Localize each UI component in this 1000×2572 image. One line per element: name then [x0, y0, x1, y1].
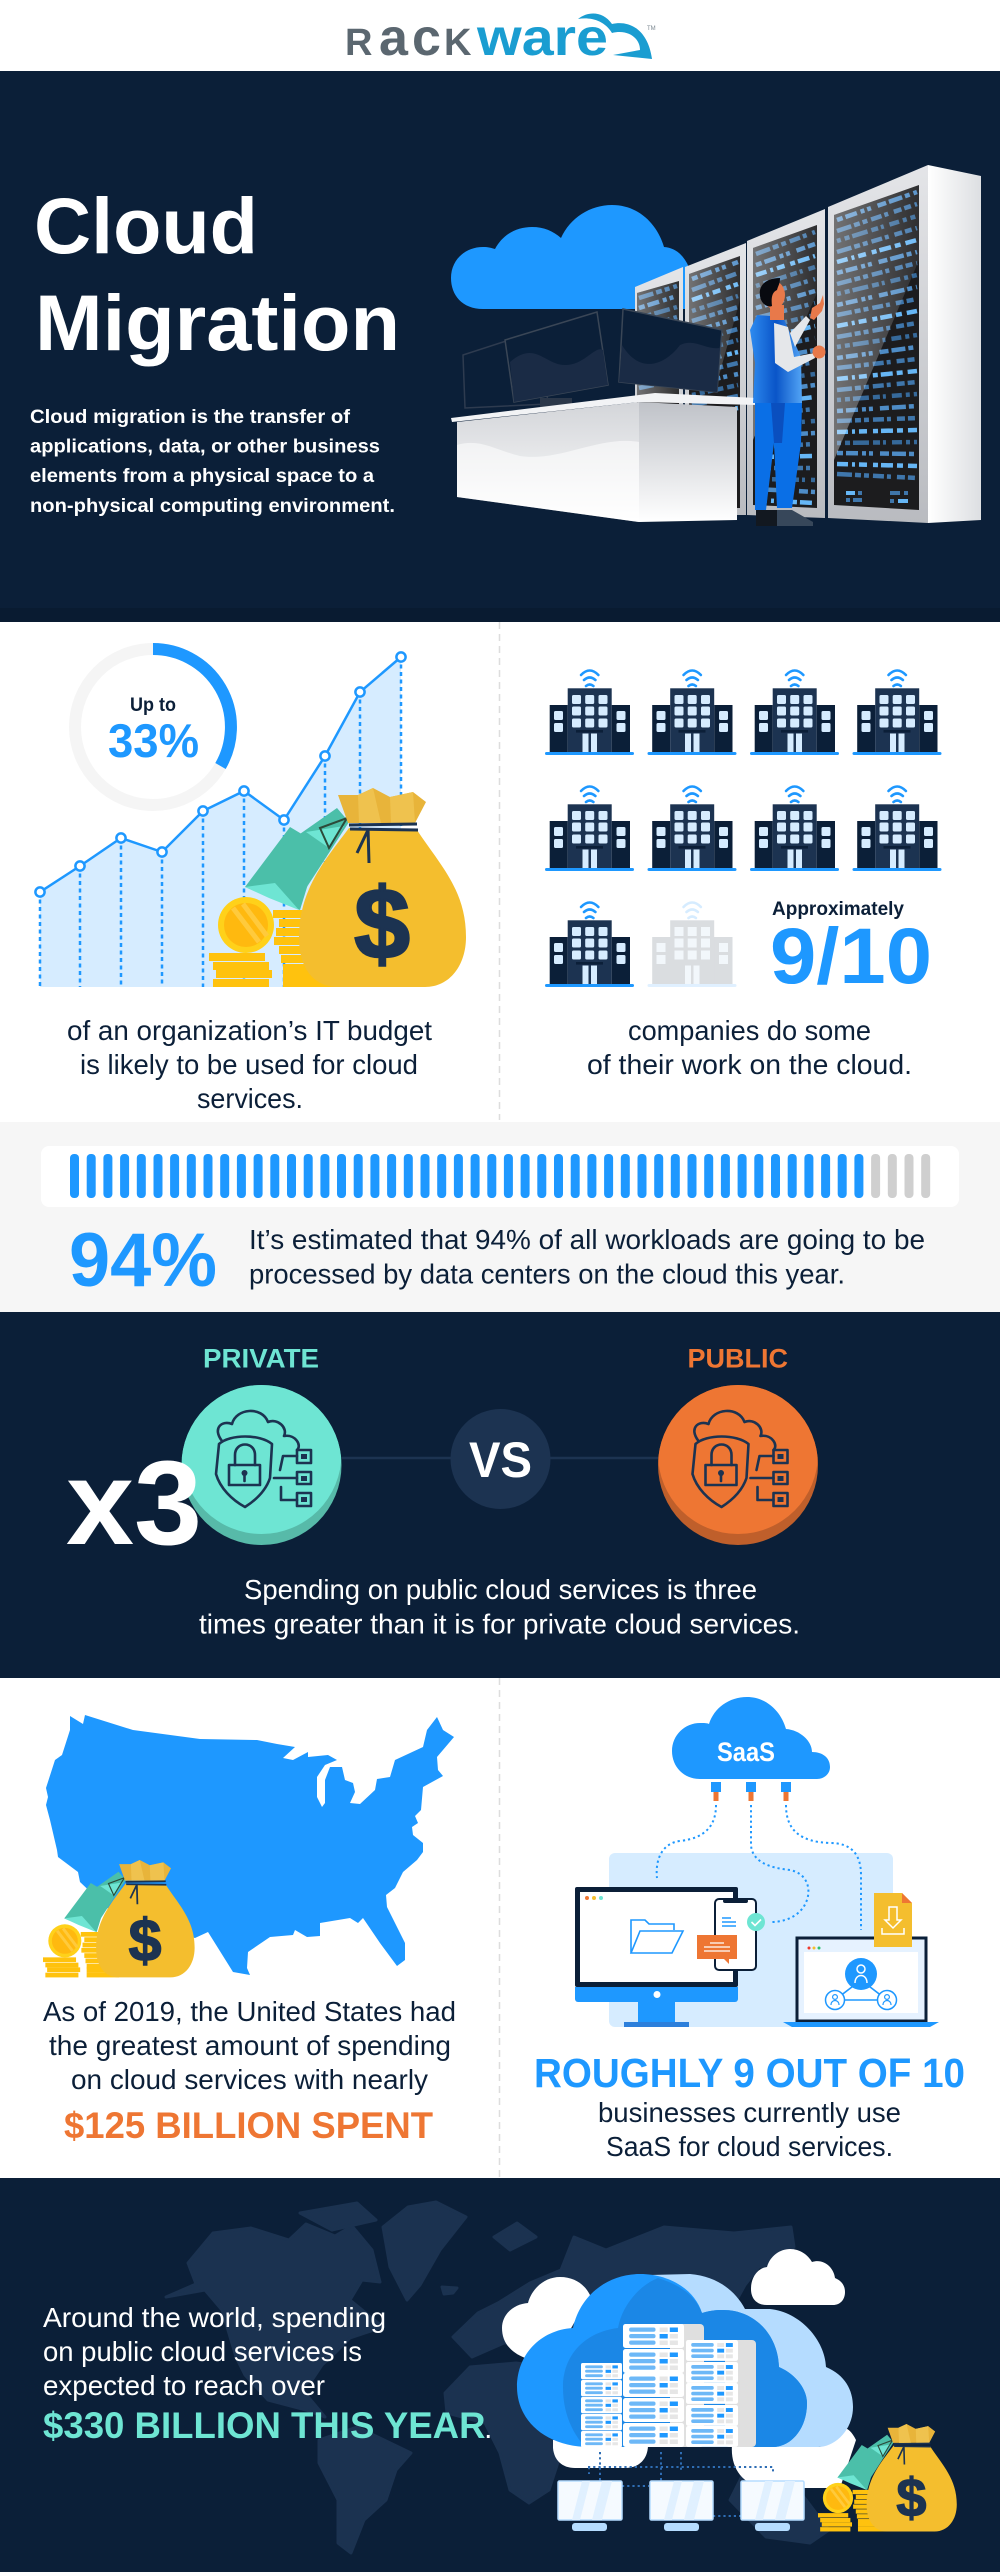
panel: 94% workloads — [0, 1122, 1000, 1312]
icon: money bag with cash and coins: $ — [354, 868, 410, 980]
description: spending: Spending on public cloud services is three — [244, 1574, 757, 1605]
stat: $330 billion: $330 BILLION THIS YEAR. — [43, 2405, 491, 2446]
text: global spending — [43, 2302, 386, 2401]
SaaS cloud — [672, 1697, 830, 1779]
description: spending: times greater than it is for private cloud services. — [199, 1608, 800, 1640]
illustration: blue cloud — [517, 2274, 853, 2447]
icon: money bag — [43, 1860, 195, 1977]
text: global spending: expected to reach over — [43, 2370, 325, 2401]
description: workloads: processed by data centers on the cloud this year. — [249, 1258, 845, 1290]
VS badge — [450, 1409, 550, 1509]
illustration: desk — [451, 393, 757, 522]
caption: US spending: the greatest amount of spending — [49, 2030, 451, 2061]
caption: companies — [587, 1015, 912, 1080]
icon: money bag — [818, 2424, 957, 2531]
chart line — [40, 657, 401, 892]
panel: SaaS — [534, 1697, 965, 2162]
caption: IT budget: of an organization’s IT budget — [67, 1015, 432, 1046]
caption: IT budget: is likely to be used for cloud — [80, 1049, 418, 1080]
icon: check — [747, 1913, 765, 1931]
intro text — [30, 406, 395, 517]
description: spending — [199, 1574, 800, 1640]
icon grid: buildings — [545, 670, 942, 987]
caption: companies: companies do some — [628, 1015, 871, 1046]
divider top — [498, 622, 500, 1120]
stat: x3: x3 — [66, 1436, 202, 1570]
heading: public: PUBLIC — [688, 1344, 788, 1374]
title: Migration — [35, 278, 400, 367]
divider bottom — [498, 1678, 500, 2178]
world map — [166, 2202, 829, 2553]
illustration: server towers — [581, 2324, 756, 2447]
icon: public cloud — [658, 1374, 818, 1545]
description: workloads: It’s estimated that 94% of all workloads are going to be — [249, 1224, 925, 1255]
chart points — [35, 652, 406, 897]
header panel — [0, 0, 1000, 71]
icon: laptop — [783, 1938, 939, 2027]
intro text: applications, data, or other business — [30, 436, 380, 458]
icon: desktop monitor — [575, 1887, 738, 2027]
caption: IT budget: services. — [197, 1083, 303, 1114]
connectors — [711, 1782, 791, 1801]
panel: global spending — [0, 2178, 1000, 2572]
panel: IT budget — [0, 622, 499, 1120]
rack lights: front rack — [837, 192, 917, 503]
illustration: client screens — [558, 2481, 804, 2531]
stat: 94%: 94% — [69, 1218, 217, 1303]
title: Cloud — [34, 181, 258, 270]
icon: phone — [715, 1899, 756, 1970]
illustration: server racks — [635, 165, 981, 523]
text: global spending: Around the world, spending — [43, 2302, 386, 2333]
illustration: monitors — [463, 309, 722, 412]
chart area — [40, 657, 401, 987]
panel: companies on the cloud — [545, 670, 942, 1080]
rack lights: third rack — [756, 232, 815, 503]
donut chart 33%: 33% — [108, 714, 199, 767]
caption: SaaS: businesses currently use — [598, 2097, 901, 2128]
caption: US spending: on cloud services with nearly — [71, 2064, 428, 2095]
caption: IT budget — [67, 1015, 432, 1114]
icon: money bag: $ — [129, 1907, 161, 1973]
icon: download file — [874, 1893, 912, 1947]
panel: private vs public — [0, 1312, 1000, 1678]
icon: private cloud — [182, 1374, 342, 1545]
background tile — [609, 1853, 893, 2027]
icon: money bag with cash and coins — [209, 788, 466, 987]
stat: 9/10: Approximately — [772, 899, 904, 920]
rack lights: second rack — [692, 262, 738, 416]
VS badge: VS — [469, 1432, 532, 1488]
stat: $125 billion: $125 BILLION SPENT — [64, 2105, 433, 2146]
caption: SaaS: SaaS for cloud services. — [606, 2131, 893, 2162]
intro text: elements from a physical space to a — [30, 465, 374, 487]
caption: US spending: As of 2019, the United States had — [43, 1996, 456, 2027]
text: global spending: on public cloud services is — [43, 2336, 362, 2367]
caption: SaaS — [598, 2097, 901, 2162]
illustration: person — [750, 278, 826, 526]
logo: TM — [647, 26, 656, 32]
title — [34, 181, 400, 367]
donut chart 33%: Up to — [130, 695, 176, 716]
map: United States — [46, 1715, 454, 1975]
intro text: Cloud migration is the transfer of — [30, 406, 351, 428]
caption: companies: of their work on the cloud. — [587, 1049, 912, 1080]
stat: roughly 9 out of 10: ROUGHLY 9 OUT OF 10 — [534, 2050, 965, 2096]
intro text: non-physical computing environment. — [30, 495, 395, 517]
logo: ware — [476, 9, 608, 67]
logo — [345, 9, 656, 67]
description: workloads — [249, 1224, 925, 1290]
panel: US spending — [0, 1678, 499, 2178]
icon: chat bubble — [697, 1935, 737, 1964]
network lines — [588, 2452, 773, 2516]
illustration: white clouds — [502, 2249, 856, 2488]
donut chart 33% — [75, 649, 231, 805]
progress bars — [70, 1154, 930, 1198]
heading: private: PRIVATE — [203, 1344, 319, 1374]
hero panel — [0, 71, 1000, 622]
dotted links — [657, 1805, 861, 1930]
icon: money bag: $ — [896, 2468, 926, 2528]
rack lights: far rack — [639, 286, 677, 388]
SaaS cloud: SaaS — [717, 1737, 775, 1767]
icon: faded building — [648, 902, 736, 987]
connector — [342, 1457, 658, 1459]
illustration: cloud — [451, 205, 694, 309]
caption: US spending — [43, 1996, 456, 2095]
chart dashed drop lines — [40, 657, 401, 987]
logo: RacK — [345, 9, 472, 67]
stat: 9/10: 9/10 — [770, 911, 932, 1000]
